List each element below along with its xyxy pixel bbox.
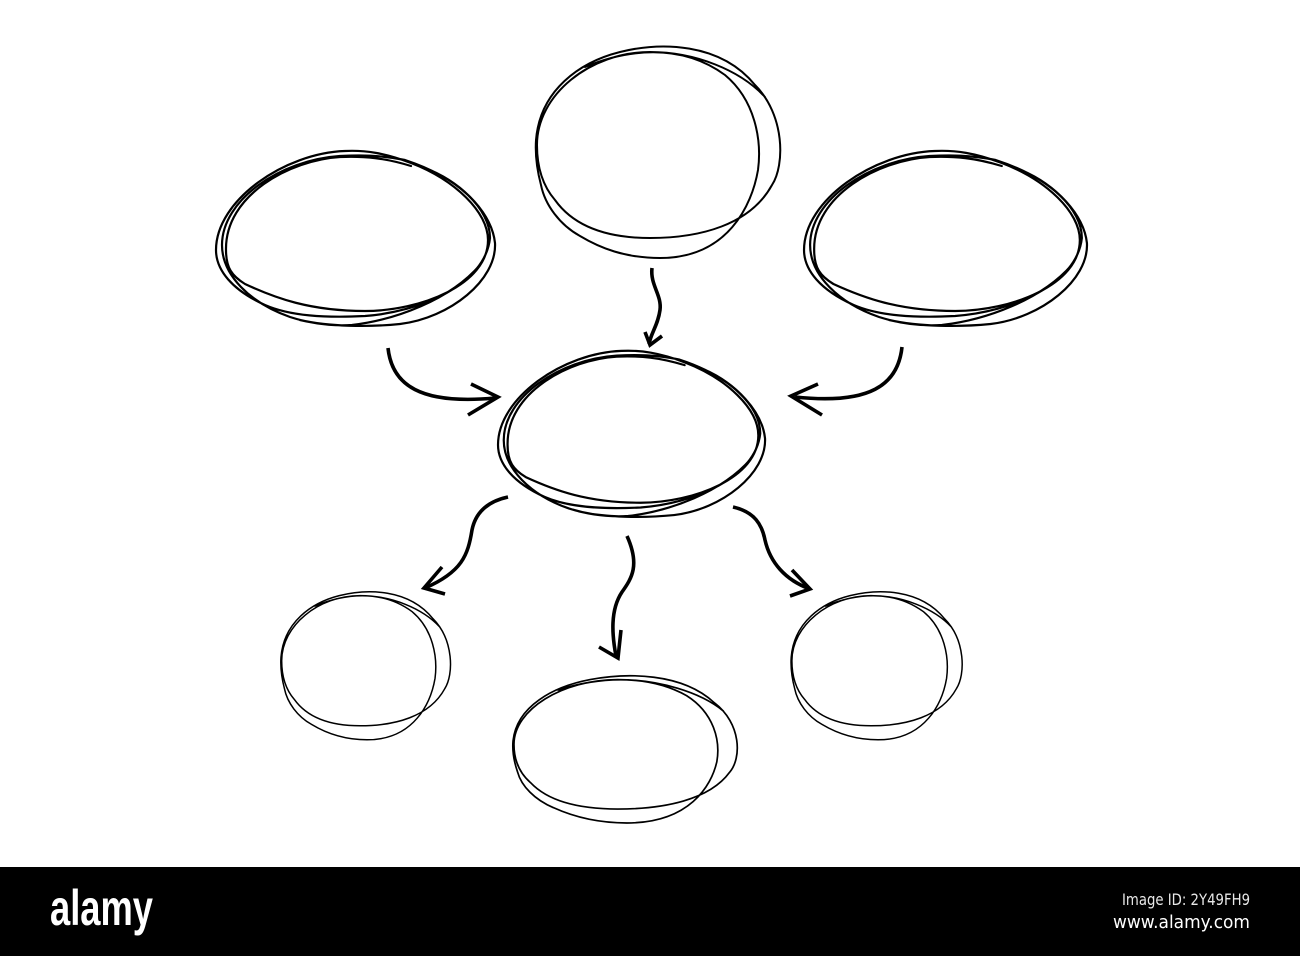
arrow: top circle to centre [645, 268, 662, 345]
arrow: centre to small left circle [424, 497, 508, 594]
top circle [536, 47, 780, 258]
arrow: right ellipse to centre [791, 347, 902, 415]
footer bar [0, 867, 1300, 956]
small left circle [281, 592, 451, 740]
image id: Image ID: 2Y49FH9 [1122, 890, 1250, 909]
bottom oval [513, 676, 737, 823]
arrow: left ellipse to centre [388, 348, 498, 415]
website: www.alamy.com [1113, 912, 1250, 933]
arrow: centre to small right circle [733, 507, 810, 596]
logo wordmark: alamy [50, 880, 153, 936]
arrow: centre to bottom oval [599, 536, 634, 658]
centre ellipse [498, 351, 765, 517]
left ellipse [216, 151, 495, 326]
right ellipse [804, 151, 1087, 326]
small right circle [791, 592, 962, 740]
